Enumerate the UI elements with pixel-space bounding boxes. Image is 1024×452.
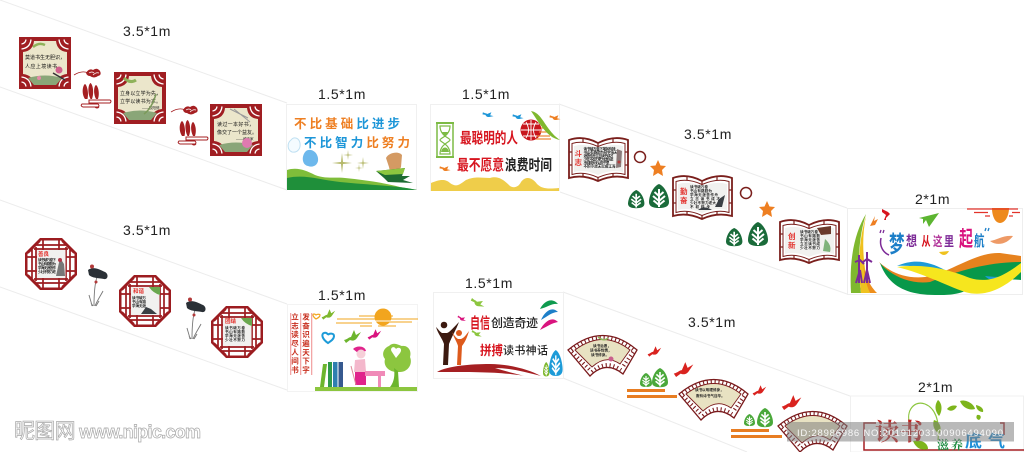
vertical couplet right: 发奋识遍天下字 (301, 312, 310, 375)
heading line two right: 浪费时间 (505, 156, 552, 174)
frame: book 创新 (780, 220, 839, 263)
label: 1.5*1m panel four: 1.5*1m (465, 275, 513, 291)
book panels group (569, 138, 839, 263)
icon: clouds (288, 138, 318, 167)
frame: book 创新: 书山有路勤 (800, 233, 820, 238)
frame: book 创新: 读书破万卷 (800, 229, 818, 234)
peach and yellow accents (939, 236, 1013, 255)
frame: quote three (210, 104, 262, 156)
frame: book 斗志: 不积跬步无以至千里 (584, 160, 610, 165)
icon: circle and star one (634, 152, 666, 176)
frame: book 勤奋: 奋 (680, 195, 688, 205)
icon: fist and ribbon (376, 153, 413, 183)
frame: octagon one: 善良 (38, 250, 50, 258)
icon: reading girl (351, 347, 385, 387)
icon: cloud ornament two (171, 106, 208, 145)
waves (879, 253, 1021, 295)
icon: cloud ornament one (74, 69, 111, 108)
icon: heart tree (315, 344, 417, 391)
slogan text: 想 (906, 233, 917, 249)
square lattice frames group (19, 37, 262, 156)
icon: leaf trees one (628, 184, 669, 208)
slogan text: 梦 (889, 231, 904, 257)
frame: octagon one: 读书破万卷下 (38, 257, 56, 262)
icon: paper plane (919, 213, 939, 227)
frame: quote three: 像交了一个益友。 (217, 129, 257, 136)
frame: quote one: 人应上境读书 (25, 63, 57, 70)
orange bars one (627, 389, 677, 398)
watermark band: ID:28986986 NO:20191203100906494090 (797, 428, 1003, 439)
frame: book 斗志: 斗 (574, 149, 582, 158)
panel: 最聪明的人 (430, 104, 561, 191)
frame: book 斗志: 书山有路勤为径学海无 (584, 150, 618, 154)
frame: book 勤奋 (673, 176, 732, 219)
heading line two: 不比智力比努力 (304, 135, 410, 150)
frame: octagon one (25, 238, 77, 290)
panel: 梦想从这里起航 (848, 208, 1022, 295)
icon: small birds (439, 108, 561, 175)
icon: leaf trees two (726, 222, 768, 246)
frame: book 勤奋: 学海无涯苦作舟 (690, 192, 718, 197)
frame: book 勤奋: 读书破万卷 (690, 184, 708, 189)
icon: feathers (540, 300, 558, 330)
frame: fan two (679, 380, 748, 420)
frame: book 创新: 新 (788, 240, 796, 250)
ground swoosh (437, 364, 541, 376)
title 读书: 读书 (875, 419, 924, 446)
frame: book 创新: 创 (788, 231, 796, 241)
frame: octagon two: 书山有路 (132, 299, 146, 304)
text 底气: 底气 (965, 431, 1005, 451)
frame: octagon three (211, 306, 263, 358)
panel: 不比基础 (286, 104, 417, 190)
slogan 拼搏: 拼搏 (480, 343, 503, 358)
frame: fan one (568, 336, 637, 376)
icon: sparkles (332, 150, 369, 173)
frame: octagon three: 书山有路勤 (225, 329, 245, 334)
slogan text: 里 (944, 234, 954, 249)
frame: octagon one: 学海无涯苦作 (38, 265, 56, 270)
icon: bird pair one (648, 346, 693, 377)
watermark band (787, 422, 1014, 442)
slogan text: 这 (933, 234, 942, 249)
frame: book 勤奋: 不积跬步 (690, 204, 710, 209)
frame: fan two: 腹有诗书气自华。 (696, 393, 725, 398)
frame: quote two (114, 72, 166, 124)
slogan 读书神话: 读书神话 (503, 343, 548, 357)
slogan text: 从 (922, 234, 930, 249)
icon: ink lotus two (186, 298, 206, 339)
frame: fan one: 读书治愚， (593, 343, 611, 348)
icon: ink lotus one (88, 264, 108, 306)
octagon frames group (25, 238, 263, 358)
panel: 读书滋养底气 (850, 396, 1024, 452)
frame: book 斗志: 涯苦作舟立志读书成才 (584, 153, 614, 158)
text 滋养: 滋养 (937, 437, 965, 452)
panel: 发奋识遍天下字 (288, 304, 418, 392)
frame: octagon three: 少壮不努力 (225, 337, 245, 342)
frame: octagon one: 少壮不努力老 (38, 269, 56, 274)
vine and leaves (909, 400, 983, 450)
icon: trees two (744, 408, 773, 427)
slogan 自信: 自信 (470, 314, 490, 332)
frame: quote two: 立学以读书为本。 (120, 98, 161, 105)
frame: octagon two: 学海无涯 (132, 303, 146, 308)
frame: fan one: 读书修身。 (591, 352, 609, 357)
orange bars two (731, 429, 782, 438)
left curved stripes (851, 214, 877, 293)
frame: book 勤奋: 书山有路勤为 (690, 188, 712, 193)
label: 3.5*1m lower right: 3.5*1m (688, 314, 736, 330)
frame: fan three (778, 412, 847, 452)
fan frames group (568, 336, 847, 452)
frame: octagon three: 读书破万卷 (225, 325, 245, 330)
icon: purple figures (855, 252, 872, 283)
icon: red figure and orange bird (870, 209, 890, 226)
icons: birds (457, 294, 486, 340)
frame: octagon two: 和谐 (133, 287, 145, 295)
slogan text: 起 (959, 228, 973, 251)
frame: quote one (19, 37, 71, 89)
icon: two figures (436, 322, 469, 365)
icon: books (320, 362, 343, 387)
heading line one: 不比基础比进步 (294, 116, 400, 131)
frame: octagon three: 学海无涯苦 (225, 333, 245, 338)
icon: bird pair two (753, 385, 801, 410)
frame: quote three: ——臧克家 (236, 136, 254, 141)
frame: fan one: 读书养性情， (590, 348, 612, 352)
frame: quote two: ——欧阳修 (142, 105, 160, 110)
frame: quote one: 莫道书生无胆识， (25, 54, 65, 61)
frame: book 斗志: 读书破万卷下笔如有神 (584, 146, 616, 151)
frame: book 创新: 立志读书成 (800, 241, 820, 246)
icon: trees one (640, 368, 668, 387)
icon: leaf badges (543, 350, 563, 376)
frame: book 斗志 (569, 138, 628, 181)
red bracket frame (864, 423, 1024, 450)
slogan text: 航 (974, 232, 984, 250)
label: 1.5*1m panel three: 1.5*1m (318, 287, 366, 303)
frame: octagon two (119, 275, 171, 327)
icon: circle and star two (740, 188, 775, 217)
icon: globe and pyramid (520, 111, 560, 140)
frame: book 创新: 学海无涯苦 (800, 237, 820, 242)
frame: book 斗志: 少壮不努力老大徒伤悲 (584, 156, 614, 162)
frame: book 斗志: 不积小流无以成江海 (584, 164, 616, 168)
heading line one: 最聪明的人 (460, 129, 518, 147)
quote marks (880, 228, 989, 255)
label: 2*1m top: 2*1m (915, 191, 950, 207)
icons: birds and hearts (313, 309, 381, 343)
yellow mountains (431, 177, 559, 191)
frame: book 勤奋: 勤 (680, 186, 688, 196)
label: 3.5*1m top left: 3.5*1m (123, 23, 171, 39)
frame: quote three: 读过一本好书， (217, 121, 254, 128)
frame: fan two: 读书以明理修身， (695, 387, 724, 392)
frame: book 创新: 少壮不努力 (800, 245, 820, 250)
slogan 创造奇迹: 创造奇迹 (491, 315, 538, 330)
frame: book 勤奋: 少壮不努力老大 (690, 200, 716, 205)
hills (287, 169, 417, 190)
label: 1.5*1m panel two: 1.5*1m (462, 86, 510, 102)
frame: book 勤奋: 立志读书成才 (690, 196, 720, 201)
icon: sun and streaks (336, 308, 418, 326)
heading line two left: 最不愿意 (457, 156, 504, 174)
label: 3.5*1m lower left: 3.5*1m (123, 222, 171, 238)
label: 2*1m bottom: 2*1m (918, 379, 953, 395)
icon: sun (967, 208, 1020, 223)
panel: 自信创造奇迹 (434, 292, 564, 378)
slogan text (889, 228, 984, 257)
vertical couplet left: 立志读尽人间书 (290, 312, 300, 375)
watermark logo: 昵图网 www.nipic.com (14, 420, 201, 443)
frame: octagon one: 书山有路勤为 (38, 261, 56, 266)
pink side rules (290, 313, 312, 375)
label: 1.5*1m panel one: 1.5*1m (318, 86, 366, 102)
frame: quote two: 立身以立学为先， (120, 90, 161, 97)
frame: octagon two: 读书破万 (132, 295, 146, 300)
icon: hourglass (436, 123, 454, 157)
label: 3.5*1m top right: 3.5*1m (684, 126, 732, 142)
frame: octagon three: 团结 (225, 317, 237, 325)
frame: book 斗志: 志 (574, 157, 582, 167)
